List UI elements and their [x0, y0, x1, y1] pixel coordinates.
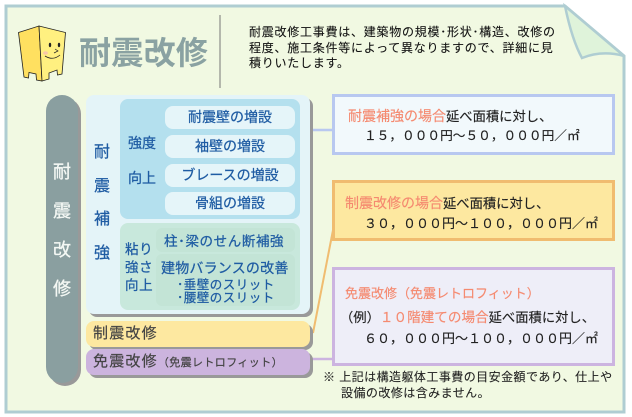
icon: smiling yellow building [18, 26, 66, 82]
item: 骨組の増設: 骨組の増設 [195, 195, 265, 211]
label: 耐震補強 [94, 143, 110, 262]
intro text: 程度、施工条件等によって異なりますので、詳細に見 [249, 40, 554, 54]
item: スリット [177, 278, 275, 305]
bar: 制震改修 [86, 321, 310, 347]
item: 柱・梁のせん断補強: 柱･梁のせん断補強 [164, 234, 284, 249]
price text: （例）１０階建ての場合延べ面積に対し、 [340, 310, 595, 325]
intro text [249, 25, 556, 70]
item: 耐震壁の増設 [165, 106, 295, 129]
callout: 制震改修の場合 [332, 180, 615, 241]
callout: 免震改修 [332, 267, 615, 366]
item: ブレースの増設: ブレースの増設 [181, 167, 279, 183]
panel: 耐震補強 [86, 95, 310, 314]
item: 袖壁の増設 [165, 135, 295, 158]
heading: 免震改修（免震レトロフィット） [345, 286, 540, 301]
label: 粘り強さ向上: 粘り [125, 242, 153, 257]
side label: 耐震改修: 改 [53, 240, 71, 260]
footnote [323, 370, 613, 400]
label: 耐震補強: 強 [94, 244, 110, 262]
price range: ６０，０００円～１００，０００円／㎡ [364, 331, 598, 346]
label: 強度向上: 向上 [128, 170, 156, 186]
label: 強度向上: 強度 [128, 135, 156, 151]
label: 粘り強さ向上: 向上 [125, 278, 153, 293]
price text: 耐震補強の場合延べ面積に対し、 [348, 108, 552, 124]
bar: 免震改修 [86, 349, 310, 375]
side label: 耐震改修 [46, 95, 78, 383]
item: スリット: ･腰壁のスリット [177, 291, 275, 305]
callout: 耐震補強の場合 [332, 94, 615, 155]
side label: 耐震改修: 震 [53, 201, 71, 221]
item: 建物バランスの改善: 建物バランスの改善 [161, 260, 289, 276]
sub-panel: tint behind balance items [156, 254, 295, 306]
footnote: 設備の改修は含みません。 [341, 386, 490, 400]
item: ブレースの増設 [165, 164, 295, 187]
panel: 粘り強さ向上 [120, 223, 300, 310]
footnote: ※ 上記は構造躯体工事費の目安金額であり、仕上や [323, 370, 613, 384]
intro text: 積りいたします。 [249, 56, 350, 70]
item: 袖壁の増設: 袖壁の増設 [195, 138, 265, 154]
label: 免震改修（免震レトロフィット） [93, 353, 283, 370]
price range: １５，０００円～５０，０００円／㎡ [364, 129, 580, 143]
label: 制震改修 [93, 325, 158, 342]
intro text: 耐震改修工事費は、建築物の規模･形状･構造、改修の [249, 25, 556, 39]
side label: 耐震改修: 修 [53, 279, 71, 299]
price range: ３０，０００円～１００，０００円／㎡ [364, 216, 598, 231]
label: 耐震補強: 耐 [94, 144, 110, 161]
item: 骨組の増設 [165, 192, 295, 215]
price text: 制震改修の場合延べ面積に対し、 [345, 195, 549, 211]
panel: 強度向上 [120, 99, 300, 219]
label: 強度向上 [128, 135, 156, 186]
item: スリット: ･垂壁のスリット [177, 278, 275, 292]
side label: 耐震改修: 耐 [53, 162, 71, 182]
item: 耐震壁の増設: 耐震壁の増設 [188, 109, 272, 125]
sub-panel: tint behind items [156, 228, 295, 252]
label: 耐震補強: 補 [94, 211, 110, 228]
label: 粘り強さ向上: 強さ [125, 260, 153, 275]
title: 耐震改修 [79, 35, 208, 71]
label: 粘り強さ向上 [125, 242, 153, 293]
label: 耐震補強: 震 [94, 178, 110, 194]
